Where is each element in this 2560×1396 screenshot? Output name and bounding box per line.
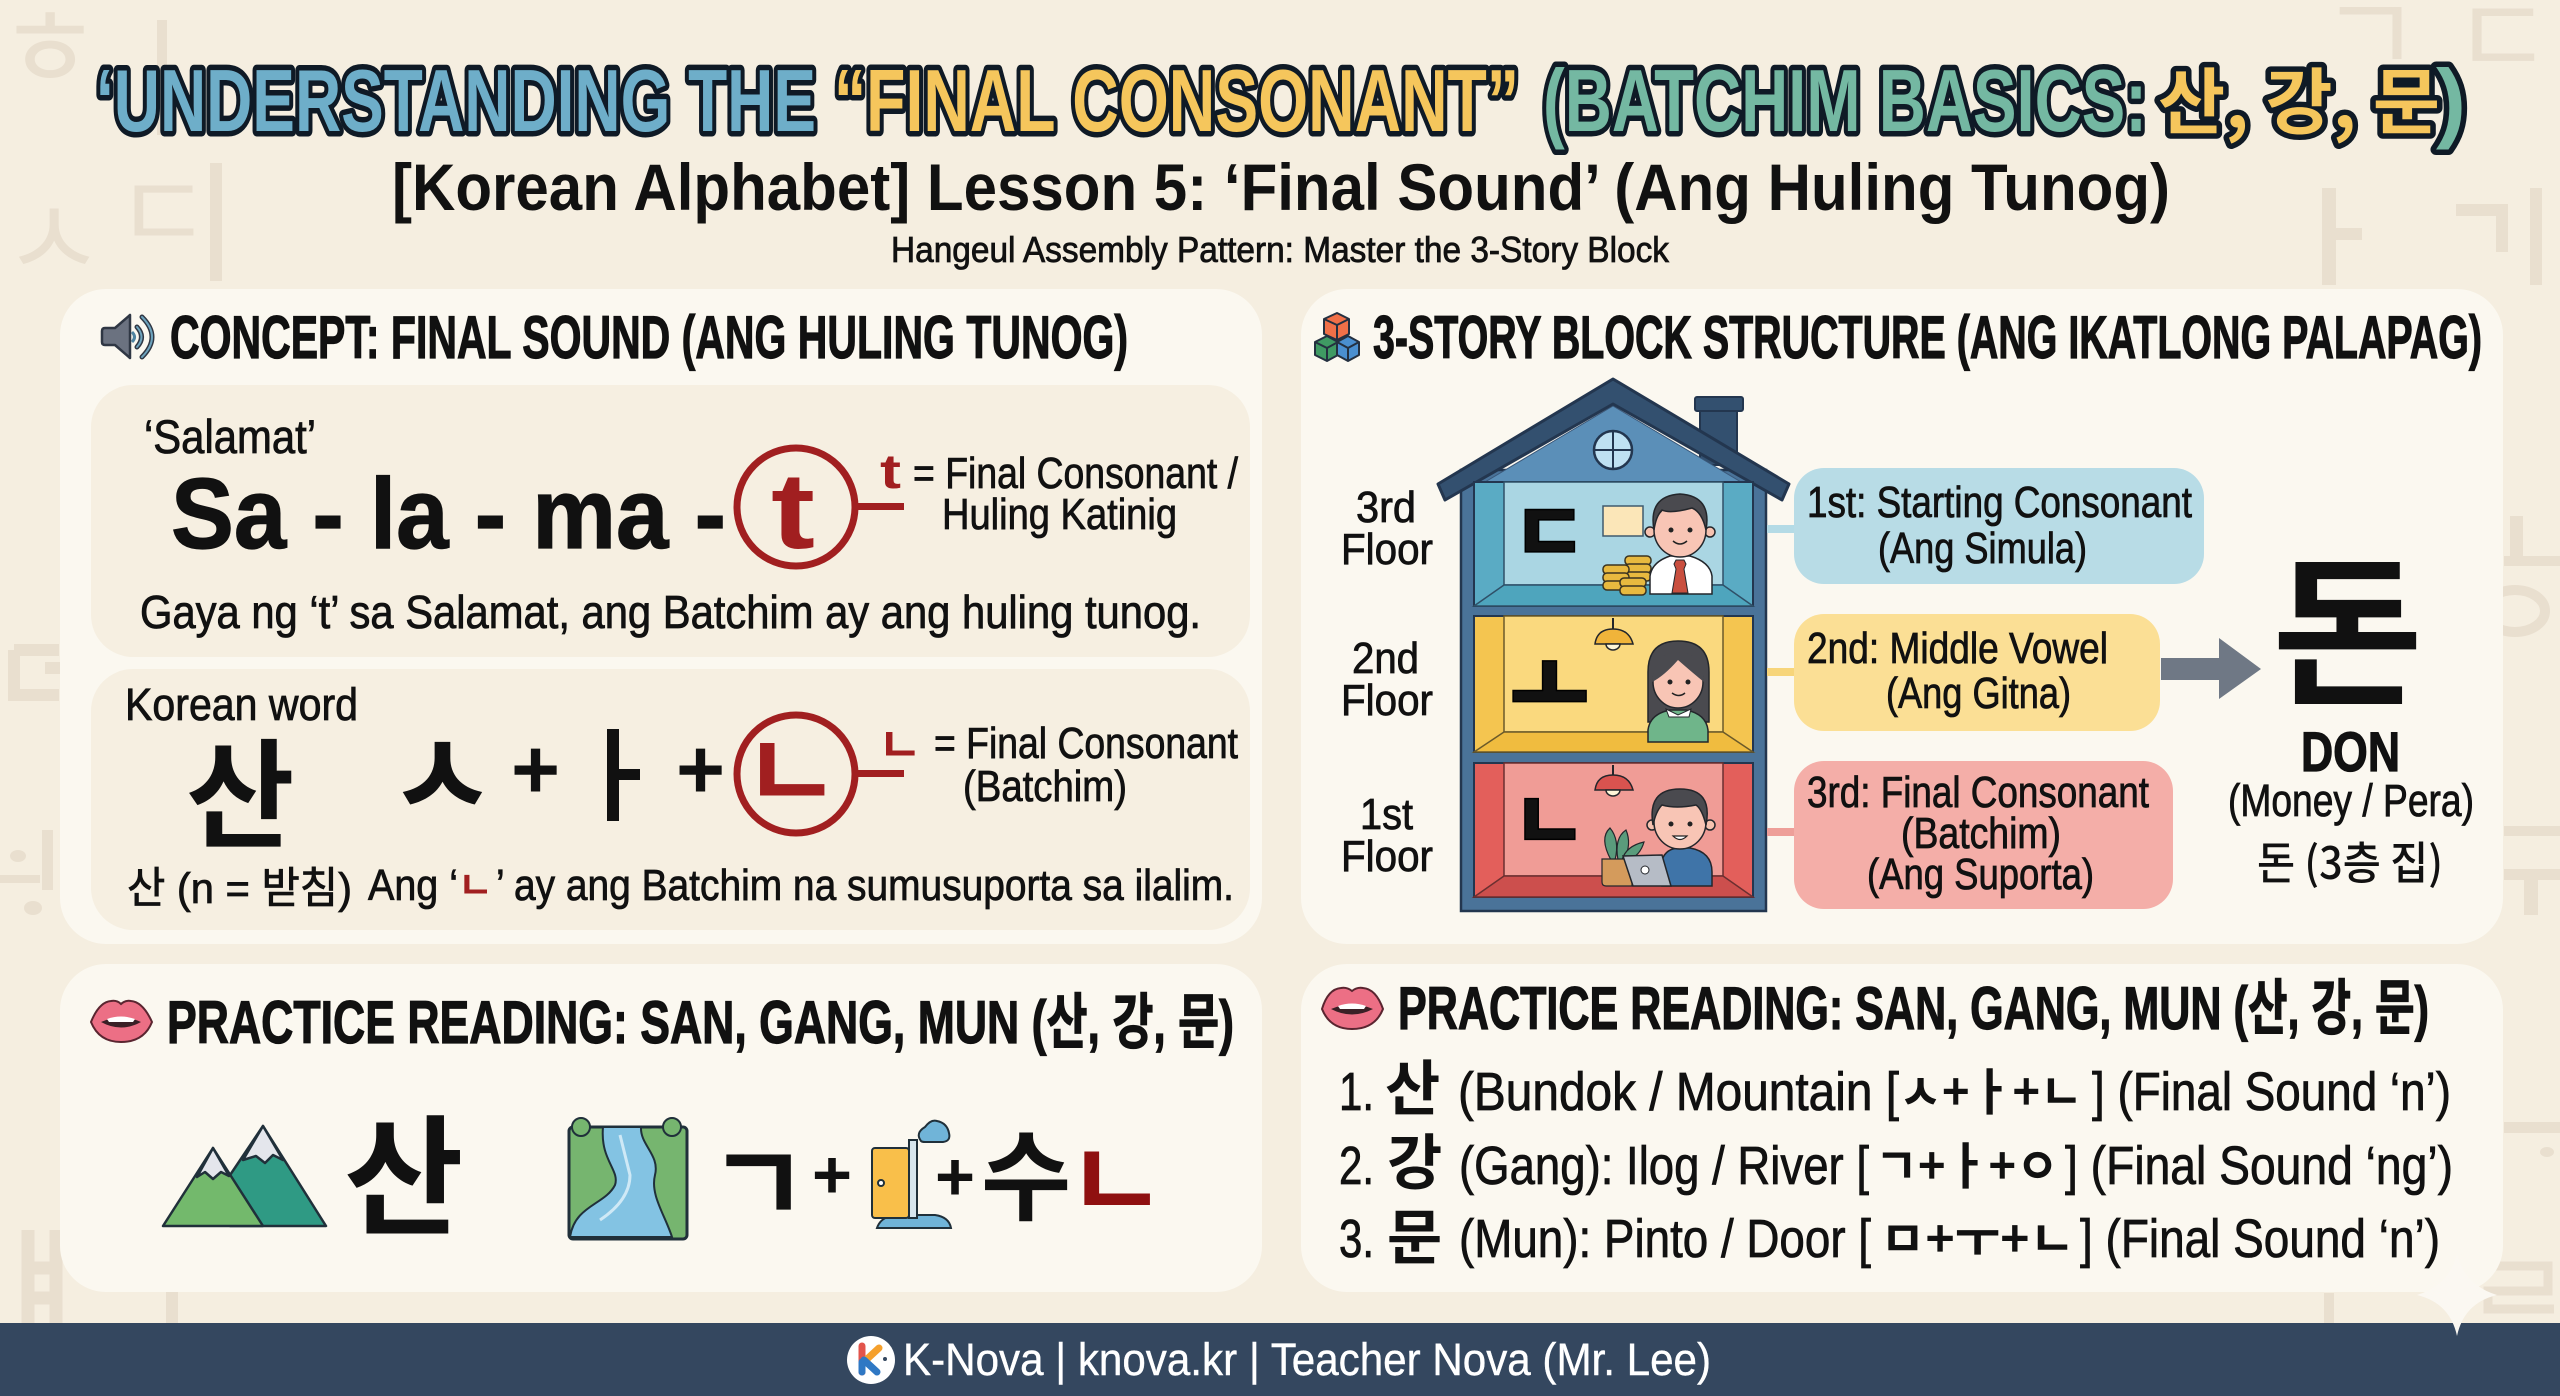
caption: ’ ay ang Batchim na sumusuporta sa ilalim.: [496, 861, 1234, 910]
floor labels: 1st: [1360, 790, 1413, 839]
lamp: [1595, 618, 1633, 650]
callout: final consonant: (Ang Suporta): [1867, 850, 2094, 899]
result syllable don: (Money / Pera): [2228, 775, 2474, 826]
result syllable don: [2228, 503, 2474, 892]
jamo giyeok: ㄱ: [708, 1096, 809, 1256]
caption: 산 (n = 받침): [127, 865, 352, 913]
plant: [1602, 828, 1644, 886]
list item: mun: [1339, 1190, 2440, 1277]
t definition: [880, 446, 1239, 539]
t definition: t: [880, 446, 901, 499]
connector lines: [1767, 525, 1795, 836]
explanation: Gaya ng ‘t’ sa Salamat, ang Batchim ay ang huling tunog.: [140, 586, 1201, 638]
nieun definition: [878, 706, 1238, 811]
title: ‘UNDERSTANDING THE: [96, 51, 816, 150]
list item: san: 산: [1385, 1041, 1440, 1128]
syllable su: 수: [981, 1099, 1071, 1241]
list item: mun: 문: [1387, 1190, 1442, 1277]
result syllable don: 돈 (3층 집): [2257, 827, 2443, 892]
syllables: Sa - la - ma -: [171, 458, 726, 570]
callout: middle vowel: [1794, 614, 2160, 731]
roof: [1438, 379, 1789, 500]
result syllable don: DON: [2301, 720, 2400, 783]
letter nieun: ㄴ: [1512, 756, 1587, 875]
list item: mun: ㅁ+ㅜ+ㄴ: [1880, 1200, 2075, 1272]
coins: [1603, 556, 1651, 595]
callout: final consonant: (Batchim): [1901, 809, 2061, 858]
list item: mun: (Mun): Pinto / Door [: [1459, 1209, 1871, 1269]
list item: gang: [1339, 1115, 2453, 1202]
callout: starting consonant: 1st: Starting Consonant: [1807, 478, 2192, 527]
word san: 산: [344, 1074, 464, 1262]
jamo breakdown: [388, 681, 725, 852]
list item: san: [1339, 1041, 2451, 1128]
nieun definition: = Final Consonant: [934, 719, 1238, 768]
footer logo: [847, 1336, 895, 1384]
label: Korean word: Korean word: [125, 679, 358, 730]
icon: door and lamp: [872, 1121, 951, 1228]
caption: [127, 855, 1234, 913]
man at laptop: [1623, 789, 1715, 886]
floor labels: [1341, 483, 1433, 881]
sub-panel: Korean word example: [91, 669, 1250, 930]
room: top floor: [1474, 467, 1753, 606]
icon: lips: [91, 1001, 152, 1042]
list item: gang: ] (Final Sound ‘ng’): [2065, 1136, 2453, 1196]
final consonant nieun: ㄴ: [1066, 1093, 1167, 1253]
icon: mountains: [163, 1126, 326, 1226]
arrow: [2161, 638, 2261, 699]
woman in green: [1648, 641, 1709, 742]
plus: +: [812, 1137, 852, 1213]
circled nieun: [737, 687, 904, 843]
picture frame: [1603, 506, 1643, 536]
room: ground floor: [1474, 756, 1753, 897]
lamp: [1595, 765, 1633, 796]
title: ): [2436, 51, 2466, 150]
icon: river: [569, 1118, 687, 1239]
plus: +: [935, 1139, 975, 1215]
man in tie: [1645, 494, 1715, 594]
gable: [1485, 406, 1741, 482]
circled t: [737, 448, 904, 571]
sub-panel: Salamat example: [91, 385, 1250, 657]
result syllable don: 돈: [2272, 503, 2423, 740]
room: middle floor: [1474, 616, 1753, 752]
icon: cubes: [1315, 313, 1359, 361]
floor labels: Floor: [1341, 525, 1433, 574]
footer: [0, 1323, 2560, 1396]
title: “FINAL CONSONANT”: [834, 51, 1519, 150]
label: Salamat: ‘Salamat’: [144, 410, 316, 463]
sparkle mark: [2417, 1253, 2497, 1336]
footer credits: K-Nova | knova.kr | Teacher Nova (Mr. Lee): [903, 1334, 1711, 1385]
t definition: = Final Consonant /: [913, 449, 1239, 498]
attic window: [1594, 431, 1632, 469]
subtitle: [Korean Alphabet] Lesson 5: ‘Final Sound’ (Ang Huling Tunog): [392, 150, 2170, 224]
list item: gang: 2.: [1339, 1136, 1374, 1196]
nieun definition: ㄴ: [878, 706, 922, 776]
house illustration: [1438, 379, 1789, 911]
circled t: t: [771, 450, 815, 571]
list item: gang: ㄱ+ㅏ+ㅇ: [1875, 1127, 2059, 1199]
panel: concept final sound: [60, 289, 1262, 944]
list item: mun: ] (Final Sound ‘n’): [2080, 1209, 2440, 1269]
caption: Ang ‘: [368, 861, 458, 910]
jamo breakdown: +: [676, 722, 725, 816]
icon: lips: [1322, 988, 1383, 1029]
list item: gang: 강: [1387, 1115, 1442, 1202]
list item: san: ] (Final Sound ‘n’): [2092, 1062, 2451, 1122]
house body: [1461, 470, 1766, 911]
panel: practice reading list: [1301, 964, 2503, 1292]
callout: final consonant: 3rd: Final Consonant: [1807, 768, 2149, 817]
background hangul watermarks: ㅅ: [3, 150, 104, 310]
panel: 3-story block structure: [1301, 289, 2503, 944]
list item: san: 1.: [1339, 1062, 1374, 1122]
letter digeut: ㄷ: [1512, 467, 1587, 586]
chimney: [1695, 397, 1743, 465]
callout: middle vowel: 2nd: Middle Vowel: [1807, 624, 2108, 673]
caption: ㄴ: [458, 855, 493, 910]
t definition: Huling Katinig: [942, 490, 1177, 539]
list item: gang: (Gang): Ilog / River [: [1459, 1136, 1869, 1196]
callout: middle vowel: (Ang Gitna): [1886, 669, 2071, 718]
panel: practice reading pictures: [60, 964, 1262, 1292]
background hangul watermarks: ㄷ: [115, 129, 212, 281]
list item: san: ㅅ+ㅏ+ㄴ: [1899, 1053, 2083, 1125]
callout: starting consonant: (Ang Simula): [1878, 524, 2087, 573]
heading: concept: CONCEPT: FINAL SOUND (ANG HULING TUNOG): [170, 304, 1128, 371]
tagline: Hangeul Assembly Pattern: Master the 3-Story Block: [891, 229, 1670, 270]
syllable san: 산: [186, 701, 295, 872]
floor labels: 3rd: [1356, 483, 1416, 532]
callout: starting consonant: [1794, 468, 2204, 584]
nieun definition: (Batchim): [963, 762, 1127, 811]
callout: final consonant: [1794, 761, 2173, 909]
jamo breakdown: ㅅ: [388, 681, 497, 852]
jamo breakdown: +: [511, 722, 560, 816]
floor labels: 2nd: [1352, 634, 1419, 683]
heading: practice left: PRACTICE READING: SAN, GANG, MUN (산, 강, 문): [167, 989, 1234, 1056]
floor labels: Floor: [1341, 832, 1433, 881]
floor labels: Floor: [1341, 676, 1433, 725]
title: (BATCHIM BASICS:: [1543, 51, 2147, 150]
title: 산, 강, 문: [2158, 44, 2440, 149]
letter o-vowel: ㅗ: [1510, 616, 1589, 741]
icon: speaker: [102, 315, 152, 358]
title: [96, 44, 2466, 150]
circled nieun: ㄴ: [742, 687, 841, 843]
list item: san: (Bundok / Mountain [: [1458, 1062, 1899, 1122]
list item: mun: 3.: [1339, 1209, 1374, 1269]
